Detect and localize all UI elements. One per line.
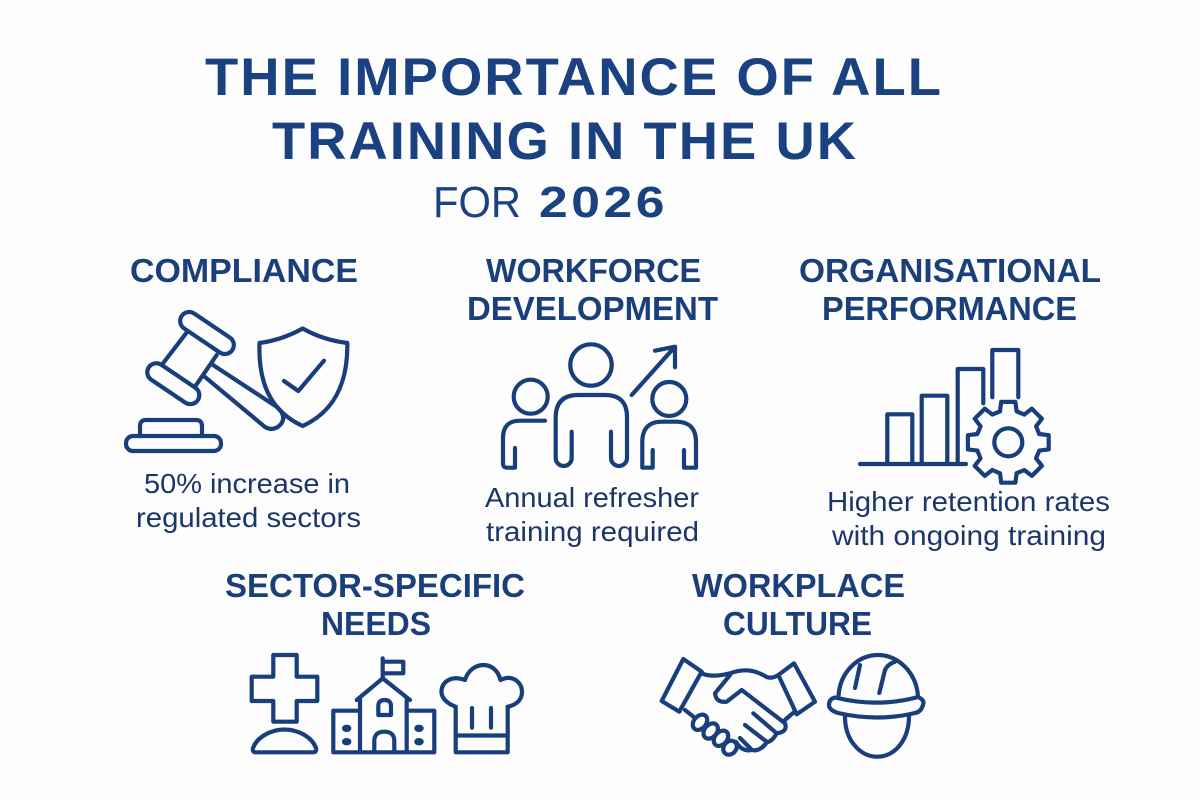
title: FOR xyxy=(433,178,521,227)
icon: chef hat xyxy=(441,665,522,752)
panel: organisational performance xyxy=(799,252,1110,551)
heading: organisational performance xyxy=(799,252,1101,327)
title: 2026 xyxy=(539,178,668,227)
heading: compliance: COMPLIANCE xyxy=(130,252,358,289)
heading: workforce development: WORKFORCE xyxy=(486,252,701,289)
heading: sector-specific needs xyxy=(225,567,525,642)
heading: workplace culture: WORKPLACE xyxy=(692,567,905,604)
title xyxy=(205,48,943,227)
panel: sector-specific needs xyxy=(225,567,525,752)
heading: workforce development xyxy=(467,252,718,327)
text: performance note: Higher retention rates xyxy=(827,486,1110,517)
text: compliance stat xyxy=(136,468,361,533)
text: workforce note: training required xyxy=(486,516,699,547)
panel: compliance xyxy=(126,252,361,533)
icon: gavel and shield xyxy=(126,308,347,451)
text: compliance stat: regulated sectors xyxy=(136,502,361,533)
heading: sector-specific needs: NEEDS xyxy=(321,605,431,642)
panel: workplace culture xyxy=(662,567,923,757)
icon: people with growth arrow xyxy=(503,344,696,468)
text: compliance stat: 50% increase in xyxy=(144,468,350,499)
heading: organisational performance: ORGANISATIONAL xyxy=(799,252,1101,289)
heading: workforce development: DEVELOPMENT xyxy=(467,290,718,327)
heading: organisational performance: PERFORMANCE xyxy=(822,290,1077,327)
icon: school building xyxy=(333,658,434,752)
text: performance note: with ongoing training xyxy=(831,520,1106,551)
icon: medical cross with figure xyxy=(252,655,317,752)
panel: workforce development xyxy=(467,252,718,547)
icon: hard hat worker xyxy=(829,655,923,757)
text: workforce note: Annual refresher xyxy=(485,482,699,513)
title: TRAINING IN THE UK xyxy=(272,112,858,171)
text: performance note xyxy=(827,486,1110,551)
icon: bar chart and gear xyxy=(860,350,1049,483)
text: workforce note xyxy=(485,482,699,547)
heading: workplace culture xyxy=(692,567,905,642)
icon: handshake xyxy=(662,659,815,757)
title: THE IMPORTANCE OF ALL xyxy=(205,48,943,107)
heading: workplace culture: CULTURE xyxy=(723,605,872,642)
heading: sector-specific needs: SECTOR-SPECIFIC xyxy=(225,567,525,604)
